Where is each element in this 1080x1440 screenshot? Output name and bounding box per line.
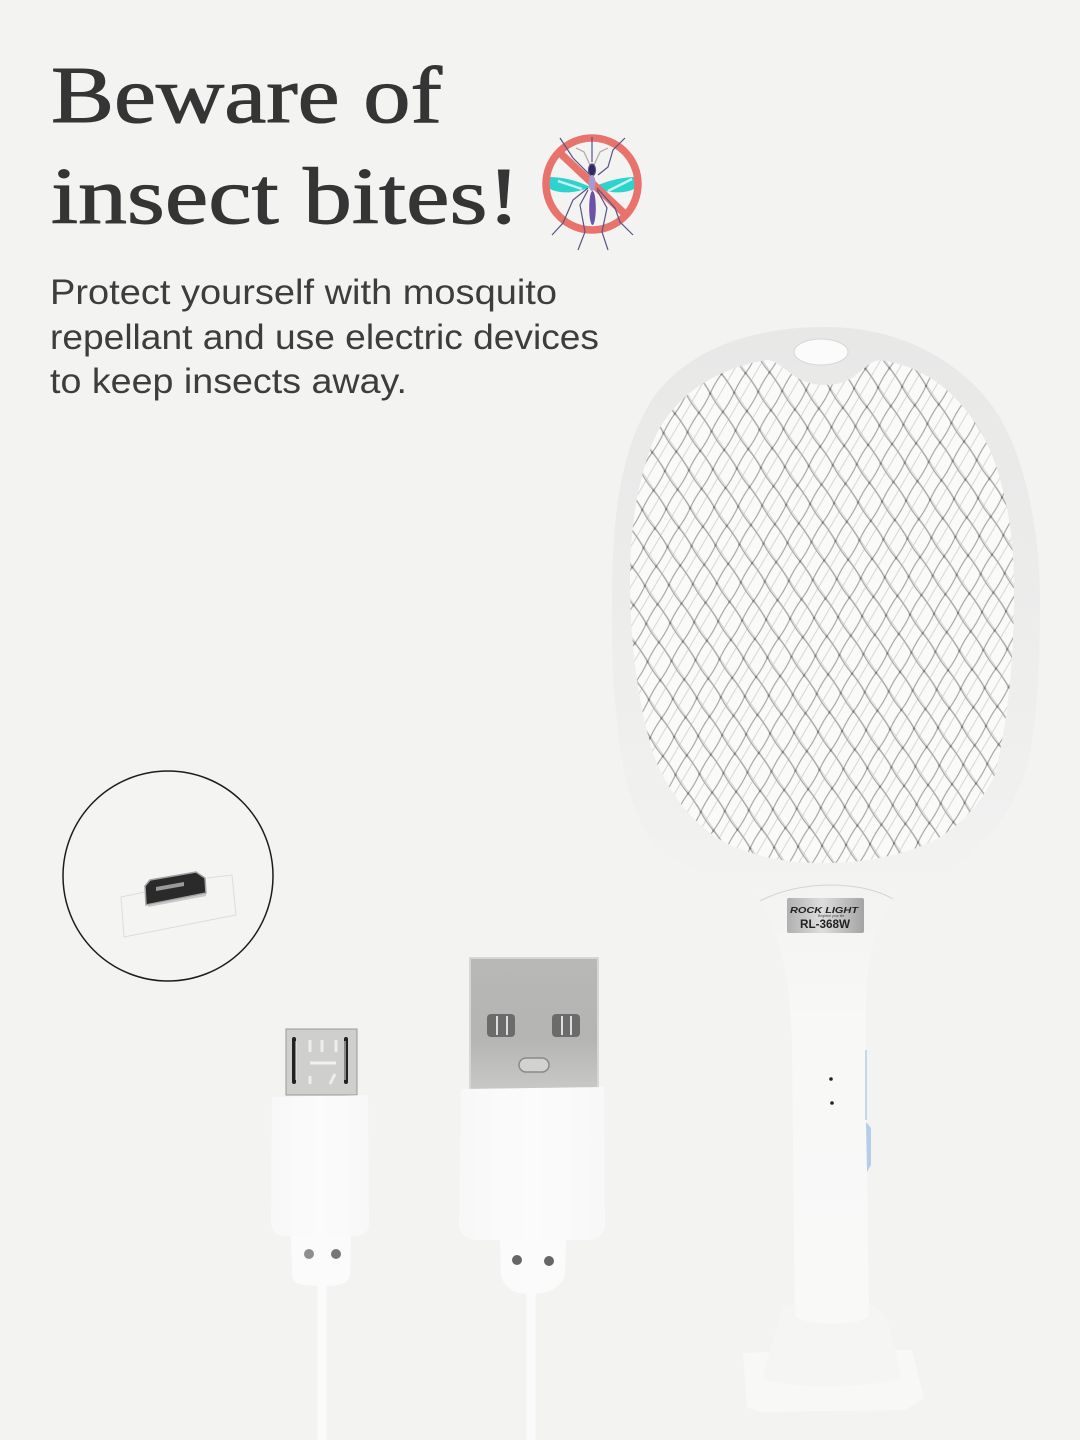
title: insect bites! — [51, 153, 520, 241]
shell dimple — [519, 1058, 549, 1072]
icon: no mosquito — [545, 137, 640, 250]
metal shell — [470, 958, 598, 1090]
micro USB connector — [271, 1029, 369, 1440]
brand badge: Brighten your life — [818, 914, 844, 918]
USB-A connector — [459, 958, 605, 1440]
shell slots — [487, 1014, 515, 1037]
cable — [526, 1290, 536, 1440]
title: Beware of — [51, 52, 442, 140]
metal tip — [286, 1029, 357, 1095]
plug housing — [271, 1095, 369, 1236]
stand — [743, 1296, 924, 1412]
brand badge: ROCK LIGHT — [790, 905, 859, 915]
brand badge: RL-368W — [800, 917, 851, 931]
body text: to keep insects away. — [50, 362, 407, 401]
mosquito wings — [545, 177, 640, 192]
indicator dots — [829, 1077, 834, 1105]
side buttons — [865, 1050, 867, 1120]
mosquito body — [552, 137, 633, 250]
plug housing — [459, 1087, 605, 1240]
strain relief — [291, 1236, 351, 1286]
body text: Protect yourself with mosquito — [50, 273, 557, 312]
strain relief — [500, 1240, 566, 1294]
body text: repellant and use electric devices — [50, 318, 599, 357]
cable — [318, 1285, 326, 1440]
mesh — [630, 360, 1014, 863]
brand badge — [787, 898, 864, 933]
racket body — [612, 327, 1040, 1330]
body text — [50, 273, 599, 401]
title — [51, 52, 520, 241]
neck seam — [760, 885, 893, 901]
prohibition ring — [546, 138, 638, 230]
inset circle: micro USB port — [63, 771, 273, 981]
hanging hole — [794, 339, 848, 365]
racket — [612, 327, 1040, 1412]
